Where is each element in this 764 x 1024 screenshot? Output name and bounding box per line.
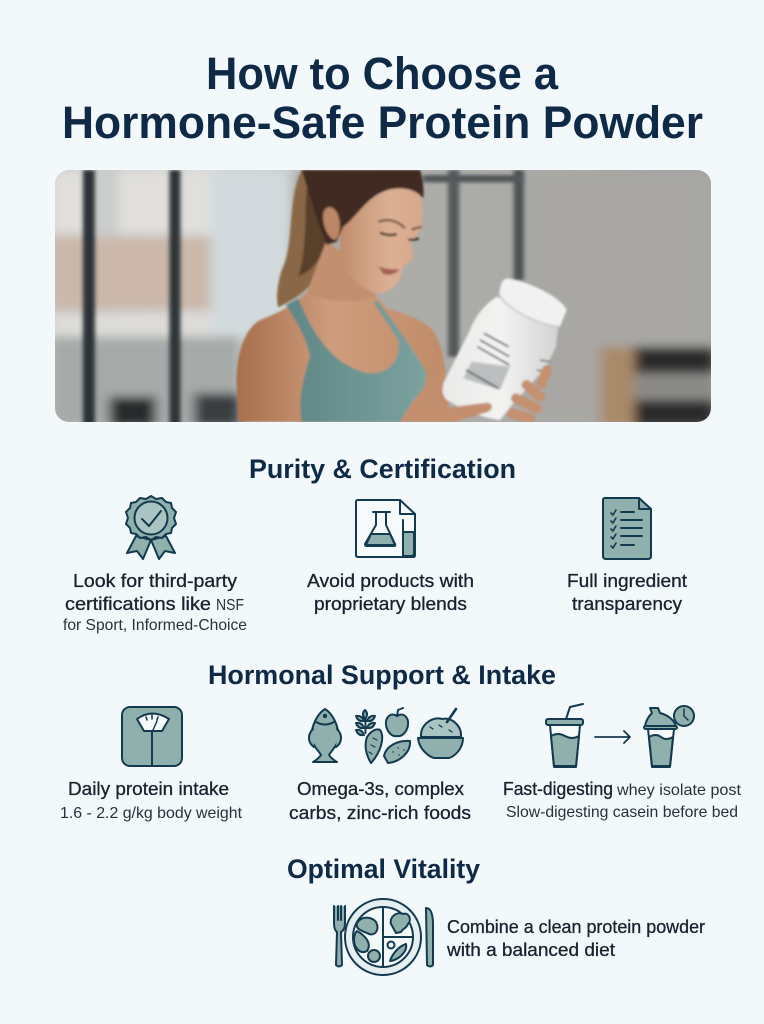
text: balanced diet: with a balanced diet — [446, 940, 615, 960]
tub nutrition label — [463, 362, 510, 390]
mouth — [378, 267, 400, 275]
text: foods — [289, 779, 471, 823]
right hand fingers — [512, 370, 547, 418]
heading: Optimal Vitality: Optimal Vitality — [287, 854, 480, 884]
text: third-party certifications: NSF — [216, 597, 244, 614]
text: balanced diet: Combine a clean protein powder — [447, 917, 705, 937]
text: balanced diet — [446, 917, 705, 960]
icon: certification rosette — [126, 496, 176, 559]
photo: woman reading a protein tub label in a gym — [50, 170, 715, 427]
title: Hormone-Safe Protein Powder — [62, 97, 703, 148]
icon: bathroom scale — [122, 707, 182, 766]
text: foods: carbs, zinc-rich foods — [289, 803, 471, 823]
text: third-party certifications: certifications like — [65, 594, 211, 614]
apple — [386, 715, 408, 736]
icon: nutrient-rich foods — [309, 708, 463, 763]
heading: Hormonal Support & Intake: Hormonal Support & Intake — [208, 660, 556, 690]
text: ingredient transparency — [567, 571, 687, 614]
ear — [323, 207, 340, 240]
hair — [302, 170, 424, 245]
title — [62, 48, 703, 148]
text: digestion timing — [503, 779, 742, 821]
icon: ingredient checklist — [603, 498, 651, 559]
icon: whey to casein shakers — [546, 704, 694, 767]
bowl — [421, 718, 461, 737]
wheat — [356, 710, 375, 735]
text: daily protein intake — [60, 779, 243, 822]
text: proprietary blends: proprietary blends — [314, 594, 467, 614]
text: digestion timing: Fast-digesting — [503, 779, 613, 799]
woman and tub — [236, 170, 567, 422]
heading: Purity & Certification: Purity & Certification — [249, 454, 516, 484]
lemon — [384, 741, 410, 763]
fish — [311, 709, 339, 762]
text: foods: Omega-3s, complex — [297, 779, 464, 799]
text: ingredient transparency: transparency — [572, 594, 682, 614]
text: daily protein intake: Daily protein intake — [68, 779, 229, 799]
text: third-party certifications — [63, 571, 247, 634]
icon: balanced plate with cutlery — [334, 899, 433, 975]
text: digestion timing: whey isolate post — [616, 782, 742, 799]
ponytail — [276, 170, 320, 308]
tank top — [286, 298, 427, 422]
tub lid — [499, 278, 567, 327]
sweet potato — [366, 729, 382, 763]
text: ingredient transparency: Full ingredient — [567, 571, 687, 591]
face — [340, 186, 423, 293]
body — [235, 292, 450, 422]
neck shade — [322, 242, 376, 301]
tub body — [443, 297, 558, 420]
title: How to Choose a — [206, 48, 559, 99]
text: digestion timing: Slow-digesting casein before bed — [506, 804, 738, 821]
icon: lab document with flask — [356, 500, 415, 557]
left hand — [399, 388, 493, 422]
text: daily protein intake: 1.6 - 2.2 g/kg body weight — [60, 805, 243, 822]
brow and eyes — [378, 220, 422, 229]
text: proprietary blends: Avoid products with — [307, 571, 474, 591]
text: third-party certifications: for Sport, Informed-Choice — [63, 617, 247, 634]
gym background — [50, 170, 715, 427]
text: proprietary blends — [307, 571, 474, 614]
text: third-party certifications: Look for third-party — [73, 571, 237, 591]
